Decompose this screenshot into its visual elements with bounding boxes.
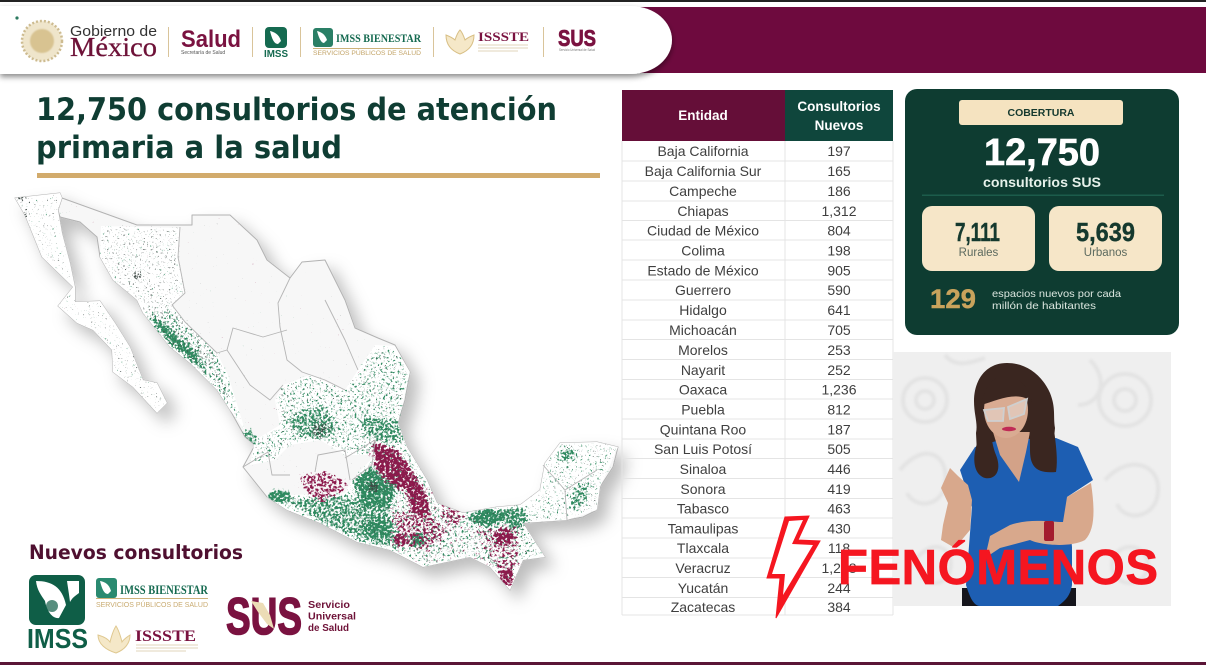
sign language interpreter video <box>893 352 1171 606</box>
table rows: Campeche <box>669 183 737 199</box>
arm right <box>985 483 1093 558</box>
table rows: 812 <box>827 402 851 418</box>
stat: 129: 129 <box>930 284 976 314</box>
title gold rule <box>37 173 600 178</box>
table rows: Hidalgo <box>679 302 727 318</box>
logo: IMSS Bienestar: IMSS BIENESTAR <box>336 31 421 45</box>
white states with consultorios <box>15 193 618 590</box>
table rows: Estado de México <box>647 262 759 278</box>
stat caption <box>992 288 1121 312</box>
glasses <box>984 399 1027 421</box>
table rows: 590 <box>827 282 851 298</box>
base land shapes <box>15 193 618 590</box>
dark mixed consultorios <box>15 193 618 590</box>
watermark: Fenómenos wordmark: FENÓMENOS <box>838 540 1158 595</box>
table rows: Sinaloa <box>680 461 727 477</box>
consultorio clusters clipped to land <box>15 193 618 590</box>
table rows: 804 <box>827 222 851 238</box>
table rows: Yucatán <box>678 580 728 596</box>
logo: IMSS: IMSS <box>264 49 288 60</box>
box: rurales: 7,111 <box>955 217 1000 247</box>
table rows: 252 <box>827 362 851 378</box>
shirt <box>960 438 1093 606</box>
logo: SUS large: Servicio <box>308 599 350 611</box>
stat caption: espacios nuevos por cada <box>992 288 1121 300</box>
table rows: 1,236 <box>821 382 857 398</box>
state boundaries <box>172 227 597 520</box>
hair back <box>974 363 1055 453</box>
logo: SUS: Servicio Universal de Salud <box>559 48 595 52</box>
table rows: Morelos <box>678 342 728 358</box>
table header: Entidad: Entidad <box>678 108 728 123</box>
title <box>36 92 557 166</box>
table rows: 244 <box>827 580 851 596</box>
maroon IMSS-Bienestar consultorios <box>297 440 520 587</box>
table rows: 198 <box>827 242 851 258</box>
bangs <box>981 376 1032 405</box>
table rows: Tlaxcala <box>677 540 729 556</box>
logo: Salud: Secretaría de Salud <box>181 50 225 56</box>
watermark: Fenómenos bolt <box>767 516 820 618</box>
pants <box>962 588 1076 606</box>
table rows: Zacatecas <box>671 599 735 615</box>
map of Mexico <box>15 193 618 590</box>
table rows: Ciudad de México <box>647 222 759 238</box>
box: urbanos <box>1049 206 1162 271</box>
background floral pattern <box>900 355 1158 583</box>
bottom edge line <box>0 662 1206 665</box>
table rows: 446 <box>827 461 851 477</box>
table rows: Quintana Roo <box>660 422 746 438</box>
neck <box>993 432 1030 482</box>
logo: IMSS Bienestar large <box>96 578 209 609</box>
logo: Salud: Salud <box>181 26 241 53</box>
logo: ISSSTE large: ISSSTE <box>135 628 196 645</box>
table rows: 186 <box>827 183 851 199</box>
table of consultorios by state <box>622 90 893 615</box>
logo: IMSS Bienestar large: SERVICIOS PÚBLICOS DE SALUD <box>96 600 209 609</box>
table rows: 1,298 <box>821 560 857 576</box>
table rows: 187 <box>827 422 851 438</box>
bracelet <box>1044 521 1054 541</box>
logo: IMSS large <box>27 575 88 654</box>
face <box>984 382 1028 438</box>
table rows: 430 <box>827 520 851 536</box>
table rows: San Luis Potosí <box>654 441 752 457</box>
box: rurales <box>922 206 1035 271</box>
table header: Consultorios Nuevos <box>785 90 893 141</box>
logo: SUS large: Universal <box>308 610 356 622</box>
table rows: Colima <box>681 242 725 258</box>
arm left <box>941 468 972 548</box>
table rows: 463 <box>827 500 851 516</box>
logo: IMSS Bienestar: SERVICIOS PÚBLICOS DE SALUD <box>313 48 421 57</box>
table rows: Guerrero <box>675 282 731 298</box>
logo: Gobierno de México: Gobierno de <box>70 24 157 40</box>
logo: IMSS <box>264 27 288 60</box>
hair front locks <box>974 400 998 478</box>
table rows: 165 <box>827 163 851 179</box>
table rows: Tamaulipas <box>668 520 738 536</box>
logo: IMSS Bienestar large: IMSS BIENESTAR <box>120 582 208 597</box>
stat caption: millón de habitantes <box>992 300 1096 312</box>
table rows: 641 <box>827 302 851 318</box>
table rows <box>645 143 857 615</box>
top edge line <box>0 0 1206 2</box>
table rows: Baja California <box>657 143 749 159</box>
table header: Consultorios Nuevos: Nuevos <box>815 118 863 133</box>
table rows: Nayarit <box>681 362 725 378</box>
logo: Gobierno de México <box>22 21 157 62</box>
logo: IMSS Bienestar <box>313 28 421 57</box>
table rows: 705 <box>827 322 851 338</box>
heading: Nuevos consultorios: Nuevos consultorios <box>29 541 243 564</box>
table rows: 419 <box>827 481 851 497</box>
logo: SUS large: SUS <box>226 588 302 646</box>
table rows: Veracruz <box>675 560 731 576</box>
table rows: Chiapas <box>677 203 729 219</box>
logo: Gobierno de México: México <box>70 32 157 62</box>
logo: IMSS large: IMSS <box>27 623 88 654</box>
table rows: 253 <box>827 342 851 358</box>
header white pill <box>0 6 672 74</box>
title: 12,750 consultorios de atención <box>36 92 557 128</box>
lips <box>1002 427 1016 431</box>
small green dot <box>15 16 19 20</box>
logo: SUS: SUS <box>558 25 596 51</box>
table rows: Oaxaca <box>679 382 727 398</box>
table rows: 384 <box>827 599 851 615</box>
table header: Consultorios Nuevos: Consultorios <box>797 99 881 114</box>
logo: ISSSTE large <box>98 626 198 653</box>
interpreter <box>941 363 1093 606</box>
logo: ISSSTE: ISSSTE <box>478 29 529 44</box>
table rows: Sonora <box>680 481 726 497</box>
box: urbanos: 5,639 <box>1076 217 1135 247</box>
table rows: 505 <box>827 441 851 457</box>
total caption: consultorios SUS <box>983 175 1101 190</box>
table rows: 118 <box>828 540 850 556</box>
table rows: 1,312 <box>821 203 857 219</box>
title: primaria a la salud <box>36 130 342 166</box>
green IMSS consultorios <box>15 193 618 590</box>
logo: SUS large: de Salud <box>308 622 349 634</box>
table rows: 197 <box>827 143 851 159</box>
box: rurales: Rurales <box>959 247 999 259</box>
total number: 12,750 <box>984 132 1100 174</box>
cobertura label: COBERTURA <box>1008 107 1075 119</box>
table grid <box>622 141 893 615</box>
box: urbanos: Urbanos <box>1084 247 1127 259</box>
table rows: 905 <box>827 262 851 278</box>
table rows: Baja California Sur <box>645 163 762 179</box>
table rows: Puebla <box>681 402 725 418</box>
table rows: Michoacán <box>669 322 737 338</box>
table header: Entidad <box>622 90 785 141</box>
logo: ISSSTE <box>446 29 529 54</box>
header band <box>0 6 1206 74</box>
panel: cobertura <box>905 89 1179 335</box>
table rows: Tabasco <box>677 500 729 516</box>
cobertura label <box>959 100 1123 125</box>
